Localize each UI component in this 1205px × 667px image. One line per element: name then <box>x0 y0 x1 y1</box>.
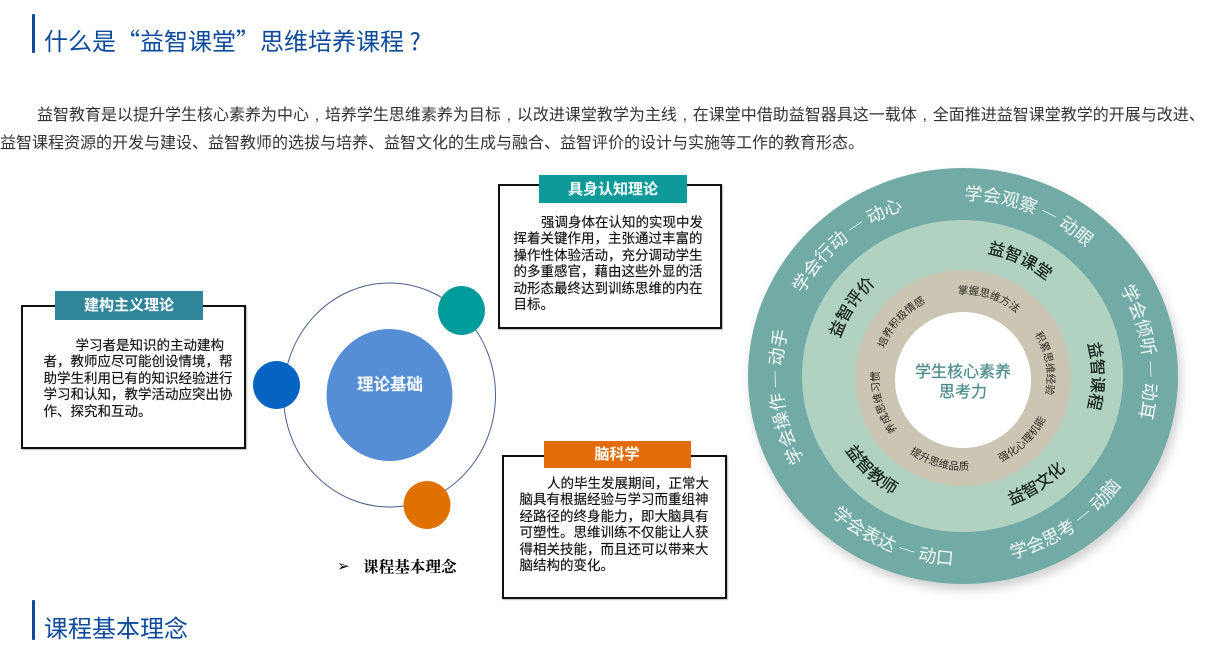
inner label: quality: 提升思维品质 <box>910 446 969 471</box>
panel text: brain science: 经路径的终身能力，即大脑具有 <box>520 505 708 525</box>
middle ring <box>802 220 1123 532</box>
panel heading: embodied cognition <box>539 175 687 203</box>
intro paragraph: 益智课程资源的开发与建设、益智教师的选拔与培养、益智文化的生成与融合、益智评价的设计与实施等工作的教育形态。 <box>0 135 864 152</box>
outer label: eye: 学会观察 — 动眼 <box>966 185 1094 248</box>
panel text: constructivism: 学习者是知识的主动建构 <box>76 334 224 354</box>
node: teal <box>438 286 485 335</box>
inner ring <box>855 270 1071 486</box>
panel: embodied cognition <box>498 175 724 330</box>
panel text: constructivism: 学习和认知，教学活动应突出协 <box>44 383 232 403</box>
middle label: evaluation: 益智评价 <box>828 278 874 338</box>
panel text: brain science: 可塑性。思维训练不仅能让人获 <box>520 521 708 541</box>
panel heading: brain science <box>544 441 690 468</box>
panel text: constructivism: 者，教师应尽可能创设情境，帮 <box>44 350 232 370</box>
bullet label: course concept: 课程基本理念 <box>363 555 457 577</box>
panel text: embodied cognition: 的多重感官，藉由这些外显的活 <box>514 260 702 280</box>
outer label: heart: 学会行动 — 动心 <box>792 200 902 291</box>
panel heading: constructivism: 建构主义理论 <box>84 294 174 315</box>
panel text: constructivism: 助学生利用已有的知识经验进行 <box>44 367 232 387</box>
centre circle: theory basis <box>326 329 452 461</box>
bullet label: course concept: ➢ <box>337 557 350 575</box>
node: blue <box>253 361 300 409</box>
outer label: mouth: 学会表达 — 动口 <box>834 506 952 566</box>
panel heading: constructivism <box>55 291 203 320</box>
outer label: brain: 学会思考 — 动脑 <box>1010 478 1122 559</box>
middle label: teachers: 益智教师 <box>844 444 900 494</box>
panel text: embodied cognition: 目标。 <box>514 293 554 313</box>
outer label: hand: 学会操作 — 动手 <box>768 330 803 465</box>
panel text: brain science: 脑具有根据经验与学习而重组神 <box>520 488 708 508</box>
node: orange <box>404 481 450 529</box>
panel text: embodied cognition: 动形态最终达到训练思维的内在 <box>514 277 702 297</box>
panel: constructivism <box>21 291 248 450</box>
inner label: methods: 掌握思维方法 <box>958 285 1020 313</box>
intro paragraph <box>0 106 1205 152</box>
panel text: embodied cognition: 强调身体在认知的实现中发 <box>541 211 703 231</box>
panel text: constructivism <box>44 334 232 420</box>
intro paragraph: 益智教育是以提升学生核心素养为中心 , 培养学生思维素养为目标 , 以改进课堂教学为主线 , 在课堂中借助益智器具这一载体 , 全面推进益智课堂教学的开展与改进、 <box>37 107 1205 124</box>
heading: what is the course: 什么是“益智课堂”思维培养课程 ? <box>44 22 421 57</box>
panel text: embodied cognition: 操作性体验活动，充分调动学生 <box>514 244 702 264</box>
panel text: constructivism: 作、探究和互动。 <box>44 400 152 420</box>
outer label: ear: 学会倾听 — 动耳 <box>1122 284 1158 420</box>
centre: core literacy: 学生核心素养 <box>915 358 1011 382</box>
inner label: habits: 养成思维习惯 <box>870 372 897 434</box>
diagram: theoretical foundation orbit <box>253 282 496 529</box>
panel heading: brain science: 脑科学 <box>594 443 640 464</box>
middle label: classroom: 益智课堂 <box>988 240 1053 281</box>
panel heading: embodied cognition: 具身认知理论 <box>568 178 658 199</box>
inner label: experience: 积累思维经验 <box>1035 330 1056 395</box>
panel: brain science <box>502 441 728 600</box>
panel text: brain science: 脑结构的变化。 <box>520 554 614 574</box>
centre circle: theory basis: 理论基础 <box>357 371 423 395</box>
outer ring <box>748 168 1178 584</box>
heading: course concept: 课程基本理念 <box>44 609 188 644</box>
orbit ring <box>284 283 496 507</box>
inner label: mental function: 强化心理机能 <box>998 416 1046 462</box>
panel text: brain science: 人的毕生发展期间，正常大 <box>547 472 709 492</box>
middle label: culture: 益智文化 <box>1008 462 1066 506</box>
panel text: embodied cognition: 挥着关键作用，主张通过丰富的 <box>514 227 702 247</box>
panel text: brain science <box>520 472 709 574</box>
centre: core literacy <box>895 312 1031 448</box>
diagram: concentric rings <box>746 168 1186 594</box>
panel text: embodied cognition <box>514 211 703 313</box>
centre: core literacy: 思考力 <box>939 378 987 402</box>
panel text: brain science: 得相关技能，而且还可以带来大 <box>520 538 708 558</box>
middle label: curriculum: 益智课程 <box>1086 342 1106 410</box>
inner label: emotion: 培养积极情感 <box>877 296 925 348</box>
